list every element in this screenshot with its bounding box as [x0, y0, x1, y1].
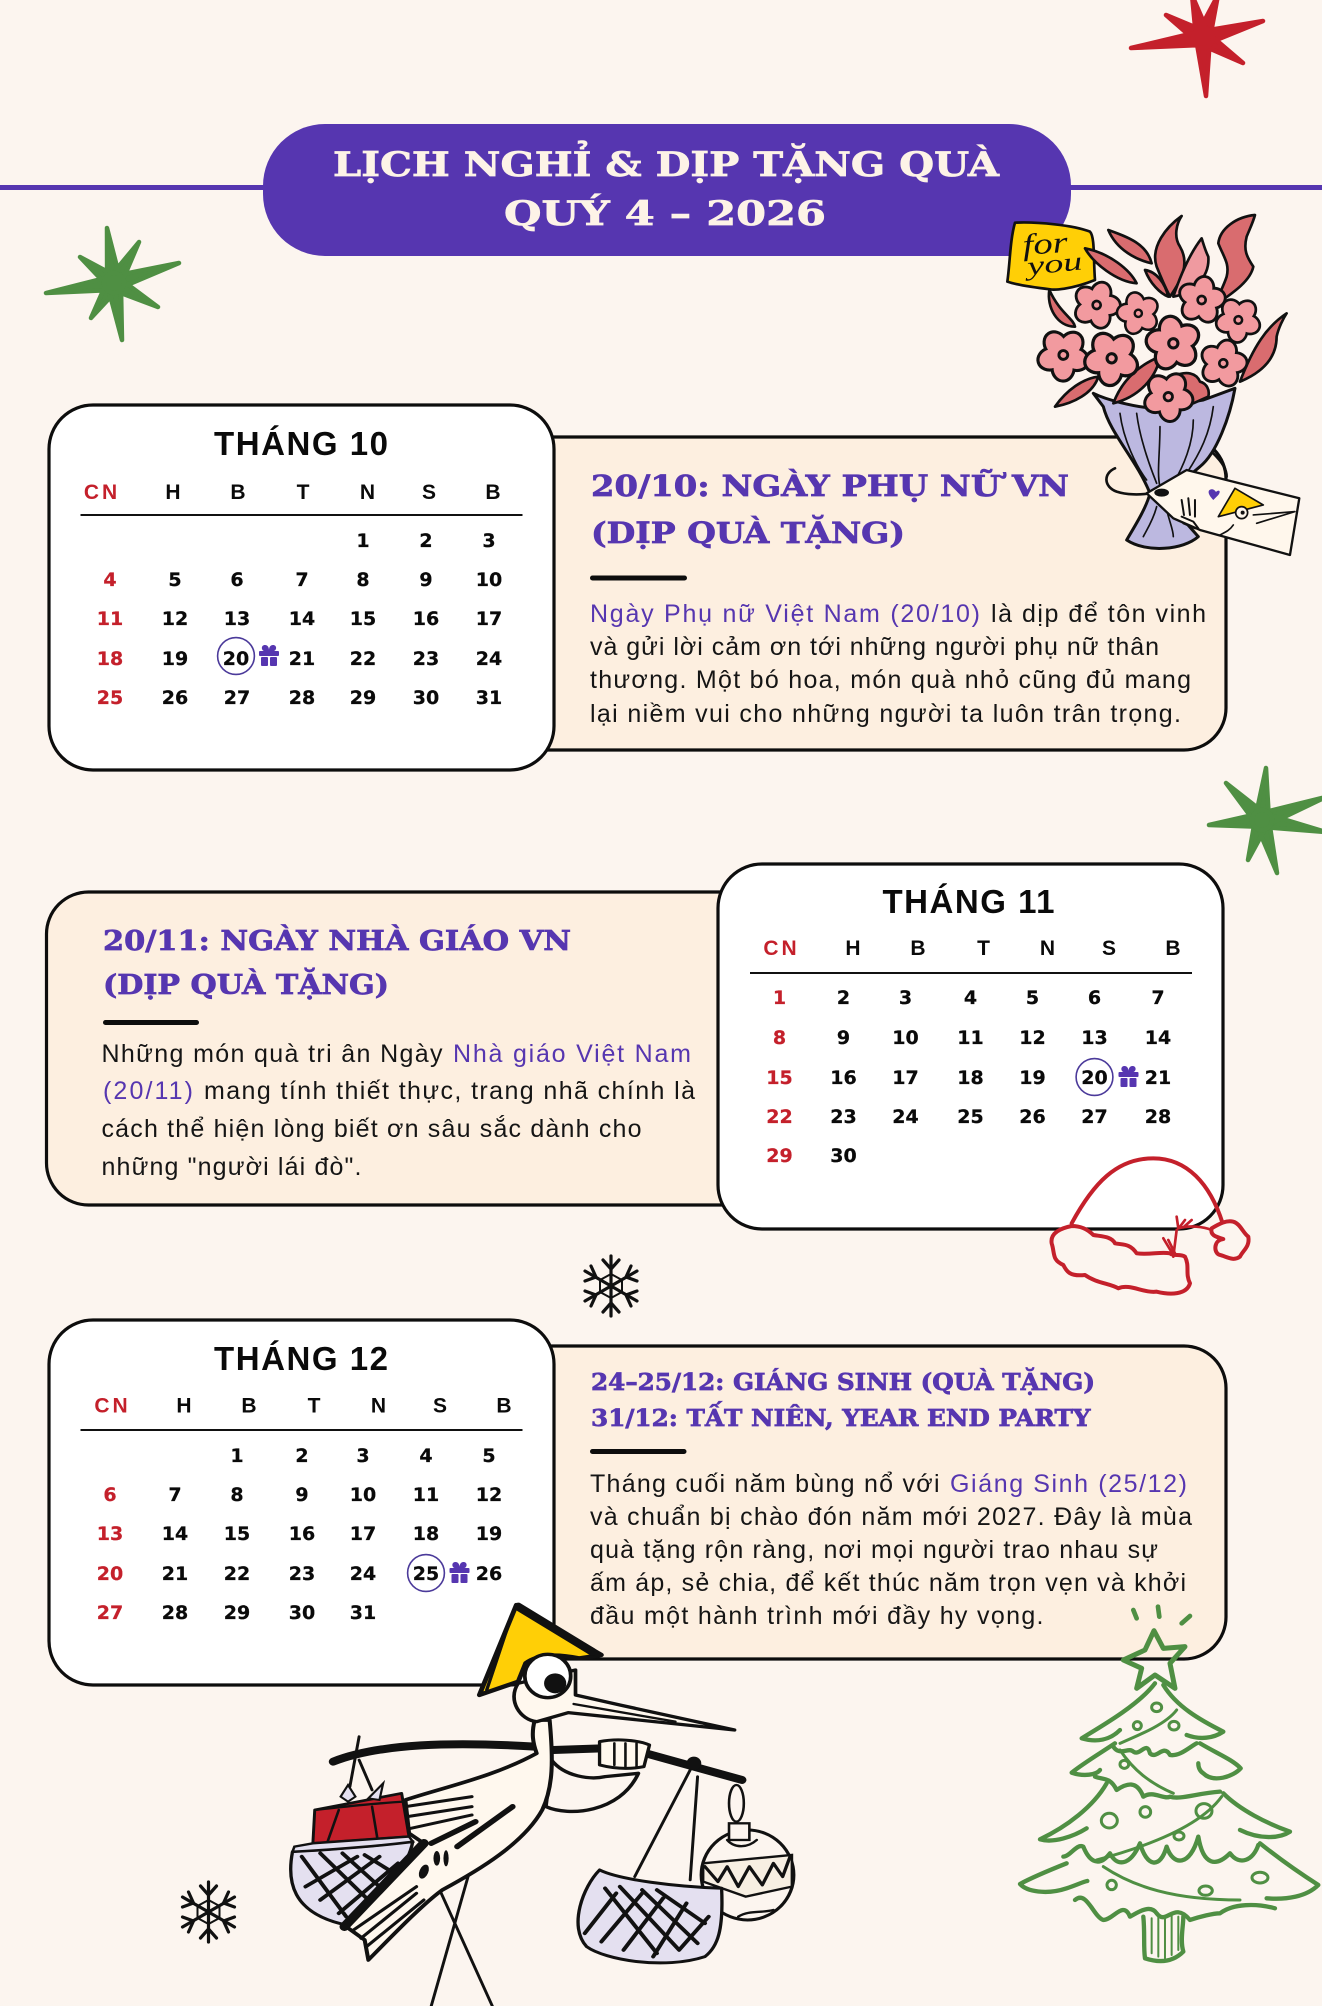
calendar: October: CN [84, 481, 120, 504]
bouquet wrap [1093, 388, 1235, 548]
calendar: October [49, 405, 554, 770]
calendar: November: 7 [1151, 987, 1165, 1009]
calendar: December: 14 [162, 1523, 188, 1545]
calendar: October: 14 [289, 608, 315, 630]
body text: December: quà tặng rộn ràng, nơi mọi người trao nhau sự [590, 1536, 1158, 1564]
calendar: December: T [308, 1394, 321, 1418]
body text: November [102, 1040, 695, 1181]
calendar: October: B [485, 481, 501, 504]
body text: November: Nhà giáo Việt Nam [453, 1040, 691, 1068]
calendar: October: 23 [413, 648, 439, 670]
calendar: November: 18 [957, 1067, 984, 1089]
calendar: November: CN [763, 937, 800, 960]
decorative star: green left [46, 228, 179, 340]
calendar: October: N [360, 481, 375, 504]
illustration: bouquet with tag [1007, 215, 1299, 555]
calendar: December: 2 [295, 1445, 309, 1467]
calendar: November: 3 [899, 987, 912, 1009]
calendar: November: 21 [1145, 1067, 1171, 1089]
calendar: November: 24 [892, 1106, 919, 1128]
calendar: December: 20 [97, 1563, 123, 1585]
calendar: December: THÁNG 12 [214, 1340, 388, 1377]
calendar: October: 5 [168, 569, 182, 591]
body text: November: cách thể hiện lòng biết ơn sâu sắc dành cho [102, 1114, 642, 1143]
legs [431, 1850, 492, 2006]
body text: November: (20/11) [103, 1077, 193, 1105]
icon: for you tag: you [1022, 246, 1084, 281]
body text: November: Những món quà tri ân Ngày [102, 1040, 443, 1068]
calendar: December: 24 [350, 1563, 376, 1585]
calendar: November: 15 [766, 1067, 793, 1089]
calendar: December: 23 [289, 1563, 315, 1585]
calendar: December: 22 [224, 1563, 250, 1585]
body text: December [590, 1470, 1192, 1630]
panel: December text [500, 1346, 1226, 1659]
right ornament [701, 1785, 794, 1920]
calendar: November: 26 [1019, 1106, 1046, 1128]
body text: October: là dịp để tôn vinh [991, 600, 1206, 628]
calendar: October: 20 [223, 648, 249, 670]
calendar: December: 11 [413, 1484, 439, 1506]
body text: October: Ngày Phụ nữ Việt Nam (20/10) [590, 600, 980, 628]
calendar: November: T [977, 937, 990, 960]
calendar: October: 21 [289, 648, 315, 670]
gift tag [1147, 470, 1299, 555]
heading: December [591, 1368, 1095, 1432]
calendar: October: 18 [97, 648, 123, 670]
calendar: November: 27 [1081, 1106, 1108, 1128]
calendar: November: 2 [837, 987, 850, 1009]
body text: December: Giáng Sinh (25/12) [950, 1470, 1187, 1498]
calendar: December: 1 [230, 1445, 244, 1467]
calendar: November: THÁNG 11 [882, 883, 1054, 920]
icon: snowflake bottom left [182, 1882, 234, 1942]
calendar: November: 14 [1145, 1027, 1171, 1049]
heading: November: (DỊP QUÀ TẶNG) [103, 967, 389, 1001]
calendar: October: 6 [230, 569, 244, 591]
decorative star: red [1131, 0, 1263, 96]
calendar: November: 10 [892, 1027, 919, 1049]
calendar: October: H [165, 481, 181, 504]
calendar: December: 10 [350, 1484, 376, 1506]
calendar: December: 13 [97, 1523, 123, 1545]
calendar: October: 15 [350, 608, 376, 630]
calendar: November: 19 [1019, 1067, 1046, 1089]
body text: October: lại niềm vui cho những người ta luôn trân trọng. [590, 700, 1181, 728]
calendar: November: B [910, 937, 926, 960]
ribbon behind wrap [1213, 453, 1227, 477]
calendar: November: N [1040, 937, 1055, 960]
calendar: October: 1 [356, 530, 370, 552]
calendar: November: 17 [892, 1067, 919, 1089]
heading: December: 31/12: TẤT NIÊN, YEAR END PARTY [591, 1402, 1091, 1432]
body text: December: ấm áp, sẻ chia, để kết thúc năm trọn vẹn và khởi [590, 1569, 1186, 1597]
calendar: November: 6 [1088, 987, 1101, 1009]
calendar: October: 16 [413, 608, 439, 630]
calendar: October: S [422, 481, 436, 504]
icon: for you tag: for [1022, 226, 1069, 262]
calendar: October: 17 [476, 608, 502, 630]
calendar: October: 4 [103, 569, 117, 591]
body text: December: và chuẩn bị chào đón năm mới 2027. Đây là mùa [590, 1503, 1192, 1531]
carrying pole [333, 1744, 742, 1780]
calendar: October: 30 [413, 687, 439, 709]
calendar: October: 11 [97, 608, 123, 630]
flowers [1028, 274, 1269, 430]
calendar: December: 17 [350, 1523, 376, 1545]
calendar: October: 31 [476, 687, 502, 709]
calendar: December: CN [94, 1394, 131, 1418]
calendar: November: 20 [1081, 1067, 1108, 1089]
heading: October: (DỊP QUÀ TẶNG) [591, 514, 905, 550]
calendar: November: 4 [964, 987, 977, 1009]
calendar: November: 28 [1145, 1106, 1171, 1128]
calendar: December: 3 [356, 1445, 370, 1467]
calendar: October: T [297, 481, 310, 504]
calendar: October: 7 [295, 569, 309, 591]
calendar: November: 22 [766, 1106, 793, 1128]
calendar: December: 30 [289, 1602, 315, 1624]
calendar: November: H [845, 937, 861, 960]
calendar: December: 28 [162, 1602, 188, 1624]
calendar: December: 19 [476, 1523, 502, 1545]
calendar: November: 30 [830, 1145, 857, 1167]
calendar: October: 8 [356, 569, 370, 591]
calendar: October: 3 [482, 530, 496, 552]
heading: December: 24–25/12: GIÁNG SINH (QUÀ TẶNG) [591, 1368, 1095, 1396]
right basket with ropes [578, 1757, 722, 1963]
calendar: October: B [230, 481, 246, 504]
calendar: November: 9 [837, 1027, 850, 1049]
calendar: November: 8 [773, 1027, 786, 1049]
calendar: November: 25 [957, 1106, 984, 1128]
heading: November [103, 924, 571, 1001]
calendar: October: 24 [476, 648, 502, 670]
calendar: December: 4 [419, 1445, 433, 1467]
calendar: December: S [433, 1394, 447, 1418]
body text: October: thương. Một bó hoa, món quà nhỏ cũng đủ mang [590, 666, 1191, 694]
calendar: December: 29 [224, 1602, 250, 1624]
body text: November: những "người lái đò". [102, 1153, 362, 1181]
calendar: October: 28 [289, 687, 315, 709]
calendar: December: H [176, 1394, 192, 1418]
calendar: December: 5 [482, 1445, 496, 1467]
calendar: October: THÁNG 10 [214, 425, 388, 462]
calendar: November: 23 [830, 1106, 857, 1128]
calendar: October: 25 [97, 687, 123, 709]
panel: November text [46, 892, 766, 1205]
calendar: October: 19 [162, 648, 188, 670]
stork body [344, 1720, 649, 1960]
icon: for you tag [1007, 222, 1095, 290]
stork head and hat [479, 1605, 735, 1730]
calendar: December: 6 [103, 1484, 117, 1506]
illustration: Christmas tree [1020, 1607, 1318, 1961]
calendar: November: 13 [1081, 1027, 1108, 1049]
calendar: November: S [1102, 937, 1116, 960]
title banner [263, 124, 1071, 256]
calendar: October: 22 [350, 648, 376, 670]
decorative star: green right [1209, 768, 1322, 873]
calendar: November: 12 [1019, 1027, 1046, 1049]
title banner: QUÝ 4 – 2026 [504, 193, 826, 234]
calendar: December: 15 [224, 1523, 250, 1545]
calendar: November: B [1165, 937, 1181, 960]
calendar: November [718, 864, 1223, 1229]
calendar: December: N [371, 1394, 386, 1418]
calendar: December: 12 [476, 1484, 502, 1506]
calendar: December: 26 [476, 1563, 502, 1585]
calendar: November: 29 [766, 1145, 793, 1167]
title banner: LỊCH NGHỈ & DỊP TẶNG QUÀ [333, 140, 1000, 185]
calendar: October: 12 [162, 608, 188, 630]
heading: October: 20/10: NGÀY PHỤ NỮ VN [591, 467, 1069, 503]
body text: October: và gửi lời cảm ơn tới những người phụ nữ thân [590, 633, 1159, 661]
calendar: November: 1 [773, 987, 786, 1009]
panel: October text [500, 437, 1226, 750]
calendar: October: 26 [162, 687, 188, 709]
icon: snowflake center [585, 1256, 637, 1316]
calendar: October: 2 [419, 530, 433, 552]
calendar: October: 29 [350, 687, 376, 709]
header line [0, 185, 1322, 190]
calendar: December: 7 [168, 1484, 182, 1506]
leaves [1049, 215, 1287, 407]
calendar: December: B [241, 1394, 257, 1418]
calendar: November: 11 [957, 1027, 984, 1049]
calendar: October: 9 [419, 569, 433, 591]
calendar: December: 25 [413, 1563, 439, 1585]
illustration: Santa hat [1051, 1158, 1249, 1294]
calendar: October: 13 [224, 608, 250, 630]
calendar: December: 31 [350, 1602, 376, 1624]
calendar: December: B [496, 1394, 512, 1418]
calendar: December: 8 [230, 1484, 244, 1506]
body text: December: Tháng cuối năm bùng nổ với [590, 1470, 940, 1498]
calendar: December: 27 [97, 1602, 123, 1624]
heading: October [591, 467, 1069, 550]
left basket with gift [291, 1737, 413, 1925]
body text: November: mang tính thiết thực, trang nhã chính là [204, 1077, 695, 1105]
illustration: stork with carrying pole [291, 1605, 794, 2006]
calendar: November: 16 [830, 1067, 857, 1089]
calendar: October: 10 [476, 569, 502, 591]
calendar: December [49, 1320, 554, 1685]
body text: October [590, 600, 1206, 728]
calendar: October: 27 [224, 687, 250, 709]
calendar: December: 9 [295, 1484, 309, 1506]
calendar: December: 18 [413, 1523, 439, 1545]
calendar: November: 5 [1026, 987, 1039, 1009]
body text: December: đầu một hành trình mới đầy hy vọng. [590, 1602, 1044, 1630]
calendar: December: 16 [289, 1523, 315, 1545]
heading: November: 20/11: NGÀY NHÀ GIÁO VN [103, 924, 571, 957]
calendar: December: 21 [162, 1563, 188, 1585]
